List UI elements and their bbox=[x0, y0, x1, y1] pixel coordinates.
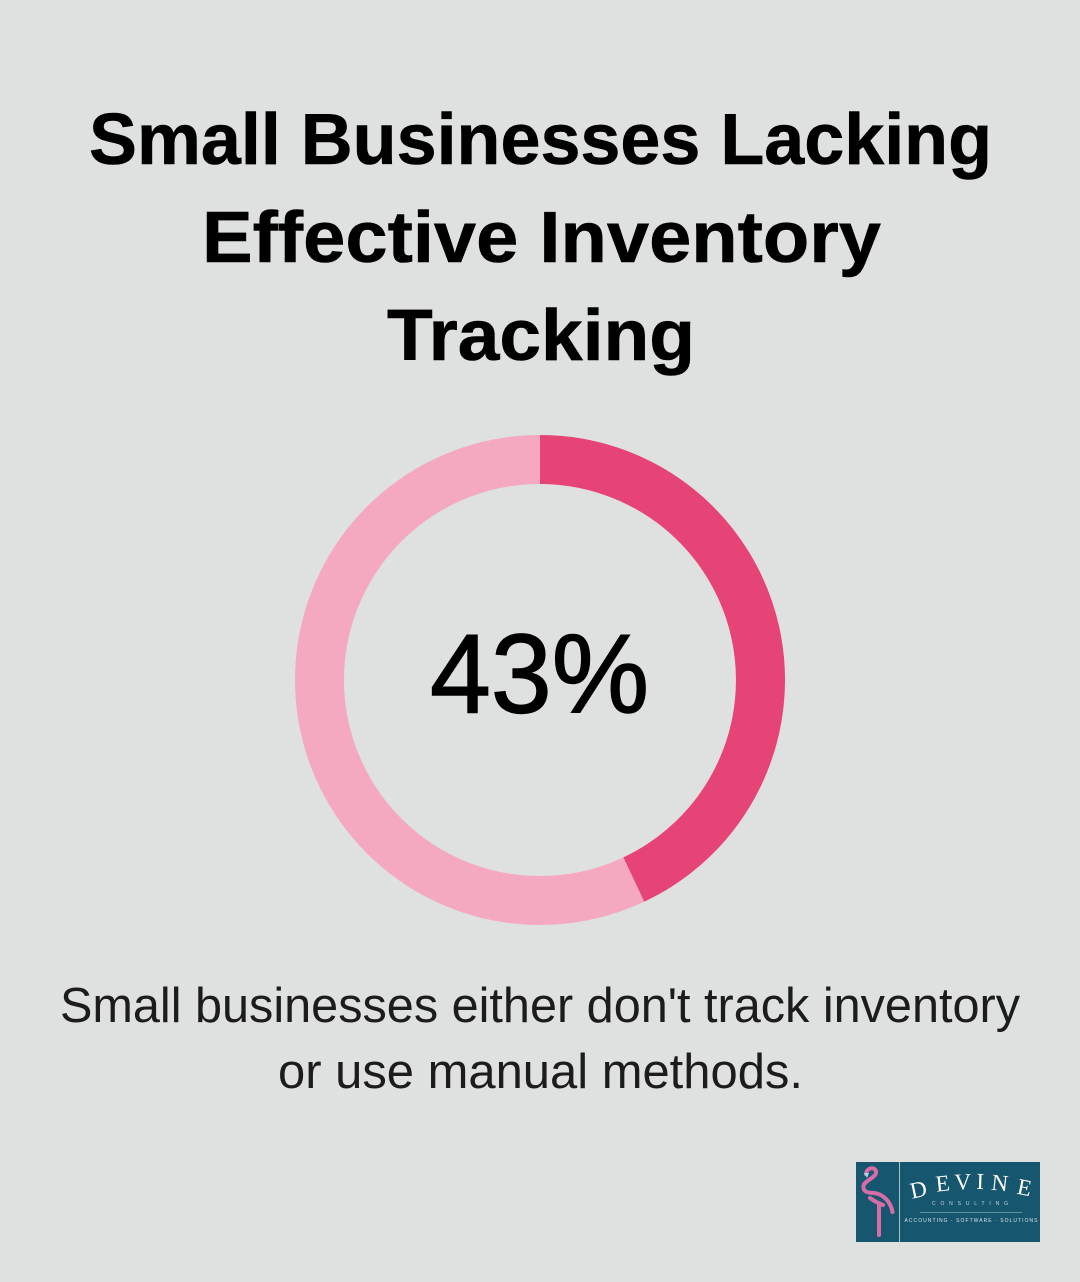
description text: or use manual methods. bbox=[278, 1045, 803, 1099]
title: Small Businesses Lacking bbox=[89, 100, 992, 180]
logo wordmark bbox=[904, 1169, 1038, 1224]
logo wordmark: E bbox=[934, 1170, 951, 1197]
flamingo beak bbox=[864, 1173, 869, 1178]
logo wordmark: I bbox=[976, 1169, 985, 1194]
title bbox=[89, 100, 992, 376]
logo wordmark: CONSULTING bbox=[932, 1201, 1008, 1207]
logo wordmark: E bbox=[1015, 1174, 1034, 1201]
percentage value: 43% bbox=[430, 612, 649, 736]
donut chart: 43% bbox=[320, 460, 760, 900]
logo wordmark: ACCOUNTING · SOFTWARE · SOLUTIONS bbox=[904, 1218, 1038, 1224]
donut highlighted segment bbox=[540, 460, 760, 880]
title: Tracking bbox=[387, 296, 695, 376]
title: Effective Inventory bbox=[202, 198, 881, 278]
logo wordmark: N bbox=[990, 1170, 1010, 1196]
description text bbox=[60, 979, 1020, 1099]
logo: Devine Consulting bbox=[856, 1162, 1040, 1242]
logo wordmark: D bbox=[908, 1176, 929, 1204]
icon: flamingo bbox=[863, 1168, 892, 1235]
logo wordmark: V bbox=[954, 1169, 972, 1195]
description text: Small businesses either don't track inventory bbox=[60, 979, 1020, 1033]
